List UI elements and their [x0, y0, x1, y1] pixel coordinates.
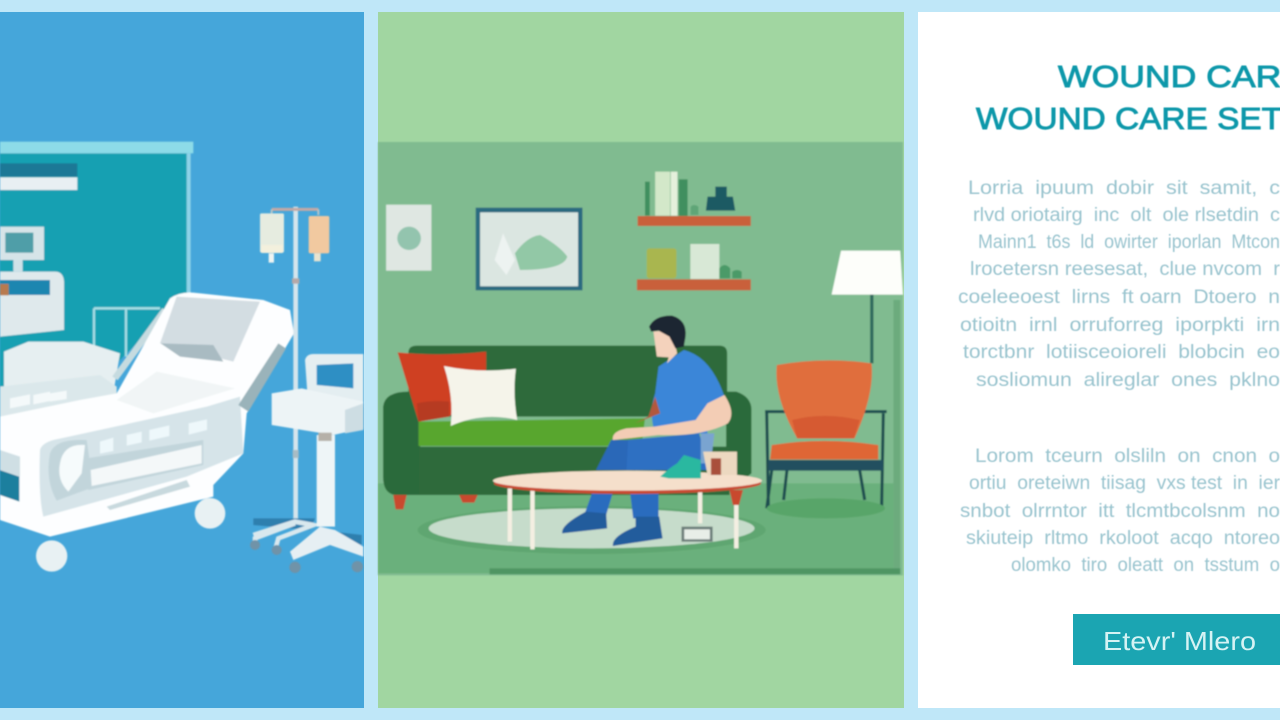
- heading: WOUND CARE SET: [976, 101, 1280, 136]
- paragraph two: olomko tiro oleatt on tsstum o: [1011, 555, 1280, 576]
- panel: home living room: [378, 12, 904, 708]
- icon: hospital bed: [0, 293, 294, 572]
- paragraph one: coeleeoest lirns ft oarn Dtoero n: [958, 287, 1280, 308]
- paragraph one: Lorria ipuum dobir sit samit, c: [968, 178, 1280, 199]
- panel: hospital room: [0, 12, 364, 708]
- paragraph two: ortiu oreteiwn tiisag vxs test in ier: [969, 473, 1280, 494]
- wall shelves: [637, 172, 751, 290]
- room wall and floor: [378, 142, 903, 575]
- rug: [418, 506, 766, 554]
- paragraph one: rlvd oriotairg inc olt ole rlsetdin c: [973, 205, 1280, 226]
- teal wall screen: [0, 142, 193, 390]
- armchair: [765, 360, 887, 518]
- paragraph two: [960, 446, 1280, 576]
- cushions: [398, 352, 517, 426]
- paragraph two: Lorom tceurn olsliln on cnon o: [975, 446, 1280, 467]
- paragraph one: otioitn irnl orruforreg iporpkti irn: [960, 315, 1280, 336]
- living room scene illustration: [378, 142, 903, 575]
- floor lamp: [832, 251, 903, 363]
- heading: [976, 59, 1280, 136]
- paragraph two: snbot olrrntor itt tlcmtbcolsnm no: [960, 501, 1280, 522]
- paragraph two: skiuteip rltmo rkoloot acqo ntoreo: [966, 528, 1280, 549]
- hospital scene illustration: [0, 142, 363, 573]
- paragraph one: sosliomun alireglar ones pklno: [976, 370, 1280, 391]
- paragraph one: lrocetersn reesesat, clue nvcom r: [970, 259, 1280, 280]
- button: [1073, 614, 1280, 665]
- paragraph one: torctbnr lotiisceoioreli blobcin eo: [963, 342, 1280, 363]
- panel: text: [918, 12, 1280, 708]
- small wall picture: [386, 205, 431, 271]
- sofa: [383, 346, 751, 509]
- icon: monitor cart: [272, 354, 363, 573]
- button: Etevr' Mlero: [1103, 626, 1256, 656]
- heading: WOUND CARE: [1058, 59, 1280, 94]
- coffee table: [493, 471, 762, 549]
- wound care kit on table: [660, 452, 737, 478]
- person seated: [562, 316, 731, 546]
- small box on floor: [682, 527, 713, 542]
- icon: bedside monitor and machine: [0, 227, 120, 393]
- icon: IV pole with bags: [250, 207, 329, 555]
- paragraph one: [958, 178, 1280, 391]
- large framed picture: [476, 208, 582, 290]
